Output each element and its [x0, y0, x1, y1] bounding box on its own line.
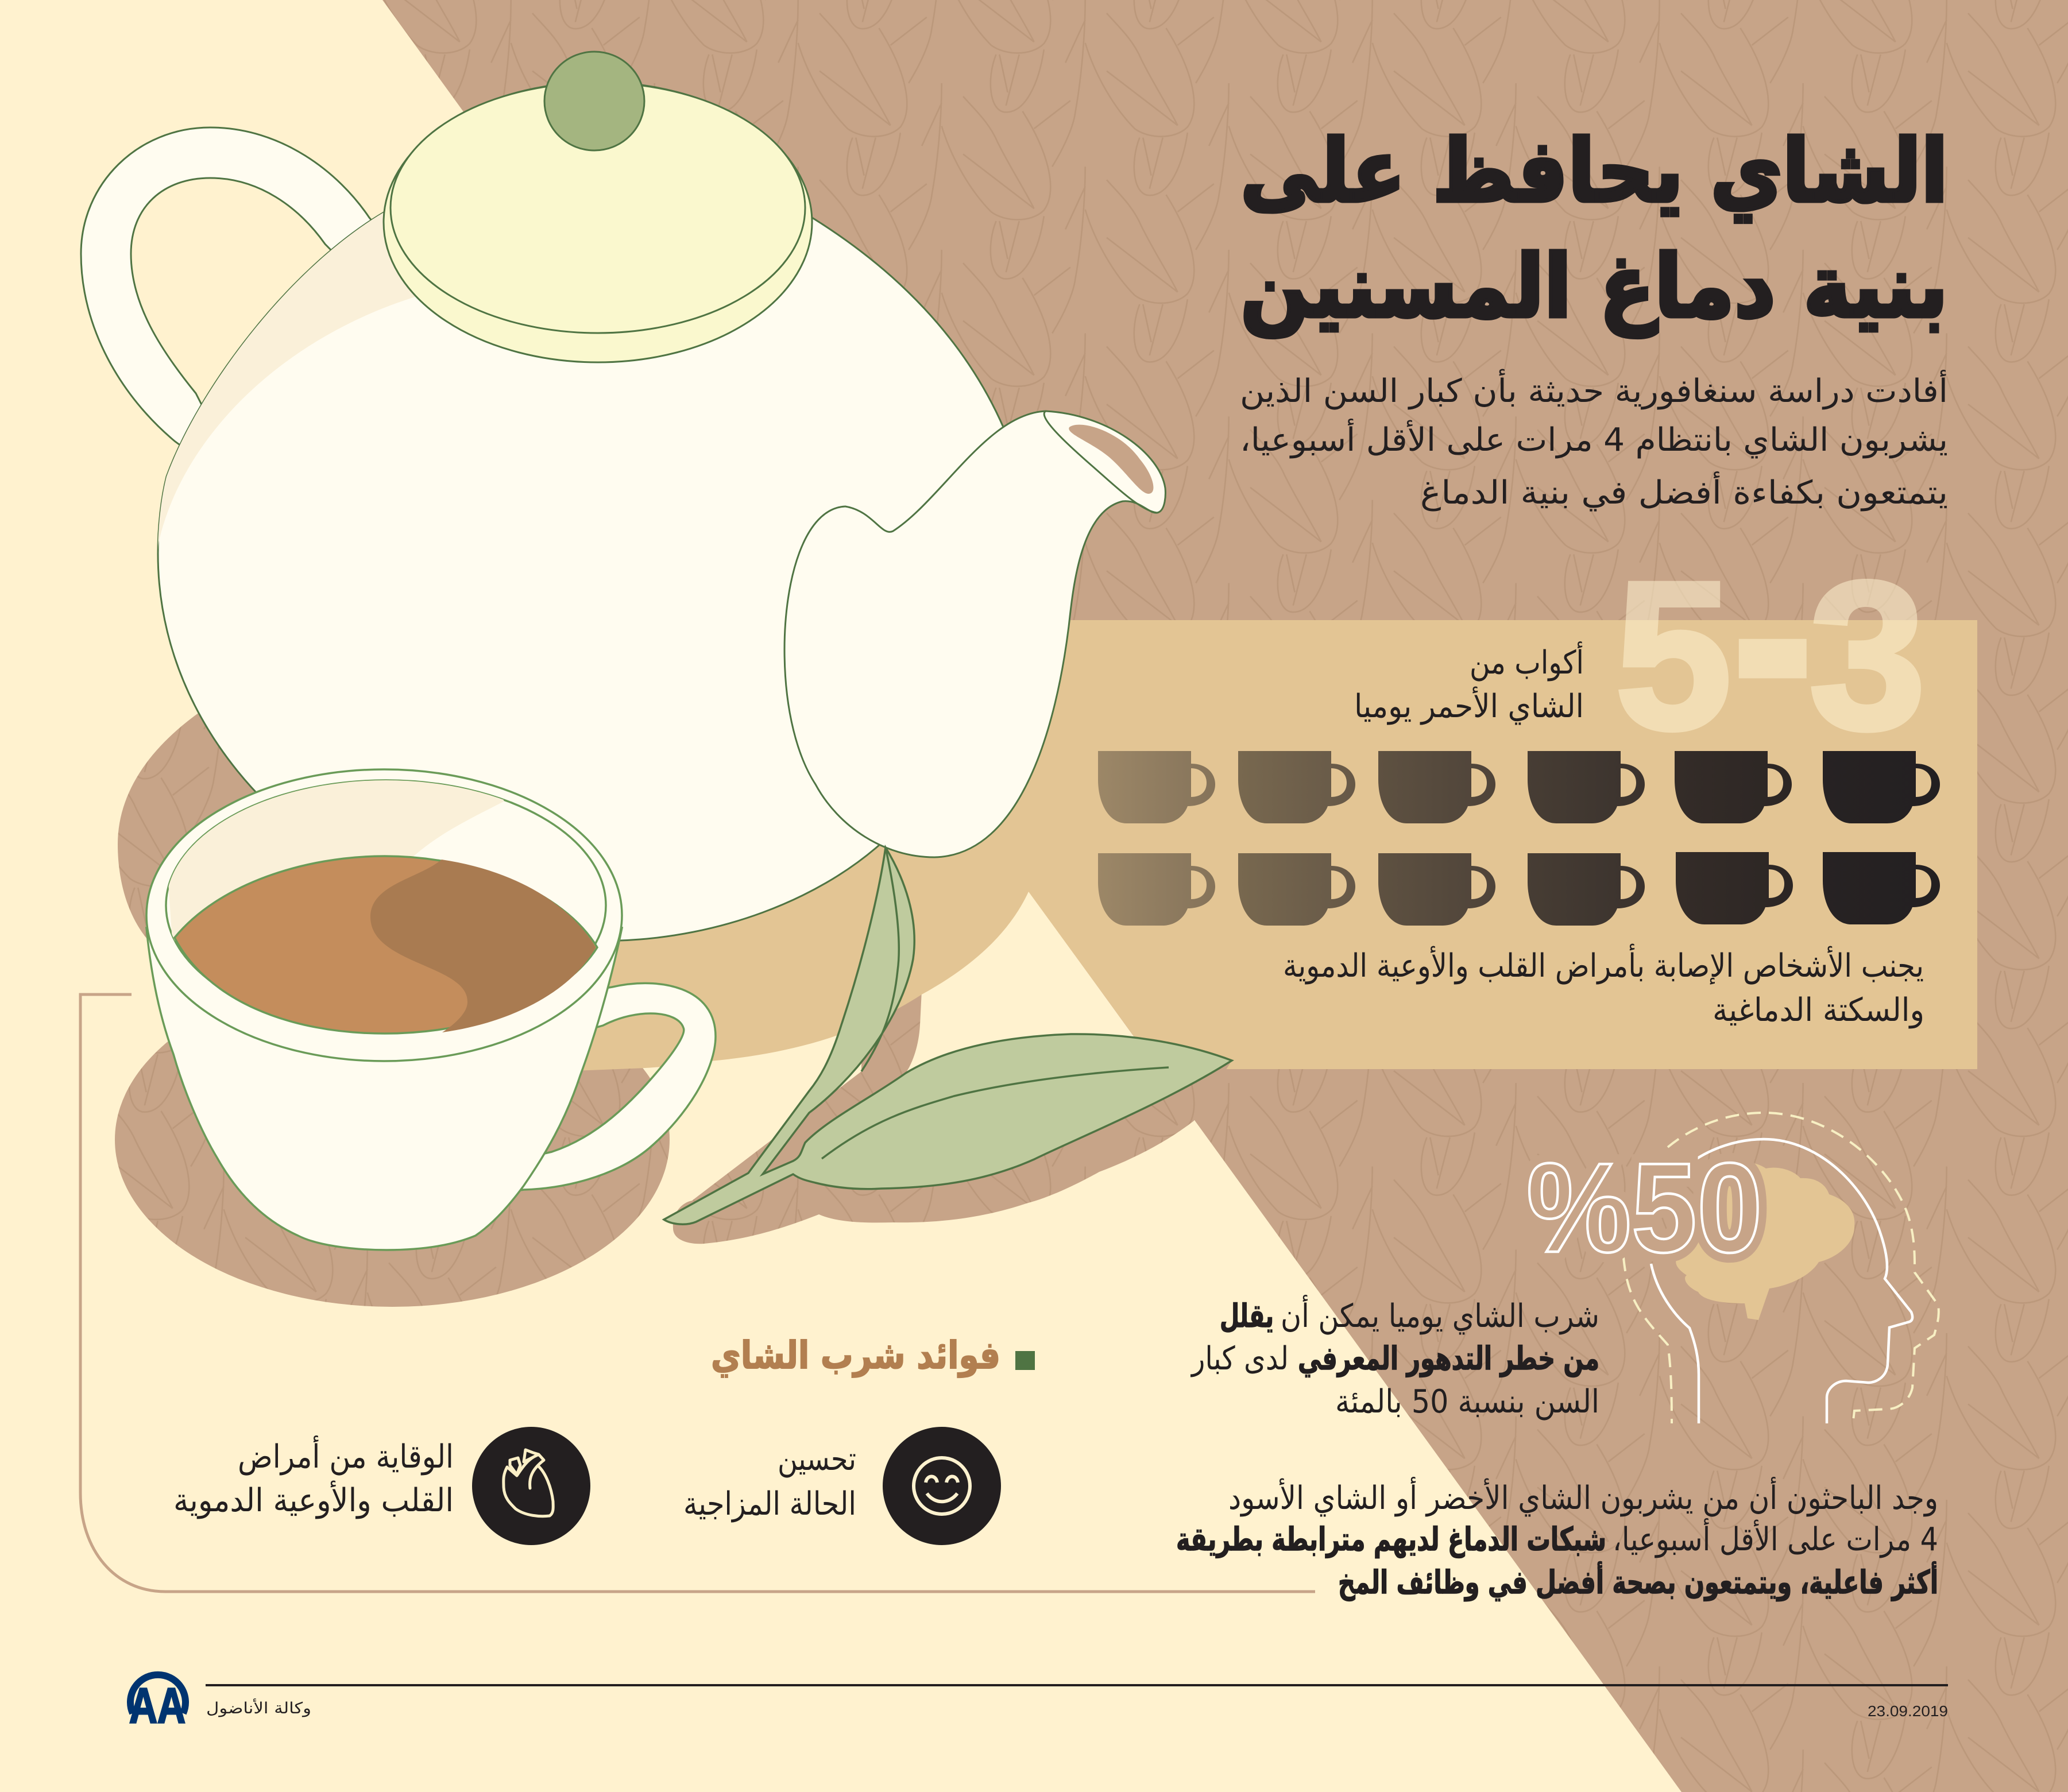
- leaf outline with stem: [664, 847, 1232, 1224]
- big number 5-3: [1615, 523, 1926, 773]
- teapot spout lip: [1044, 411, 1157, 513]
- brain: [1676, 1163, 1854, 1320]
- researchers text: وجد الباحثون أن من يشربون الشاي الأخضر أو الشاي الأسود: [1228, 1477, 1938, 1517]
- cognitive decline text: يقلل: [1220, 1298, 1274, 1335]
- agency name: وكالة الأناضول: [206, 1698, 311, 1717]
- big number 5-3: 5: [1615, 538, 1732, 773]
- band caption: يجنب الأشخاص الإصابة بأمراض القلب والأوعية الدموية: [1283, 943, 1924, 985]
- shadow: leaves, patterned: [673, 990, 1232, 1244]
- benefit: mood: تحسين: [778, 1441, 856, 1478]
- intro text: يشربون الشاي بانتظام 4 مرات على الأقل أسبوعيا،: [1240, 419, 1948, 459]
- logo: Anadolu Agency: AA: [129, 1678, 185, 1733]
- title: الشاي يحافظ على: [1240, 122, 1948, 222]
- teapot body: [158, 212, 1016, 940]
- benefit: heart disease prevention: الوقاية من أمراض: [238, 1435, 454, 1476]
- cognitive decline text: شرب الشاي يوميا يمكن أن: [1281, 1295, 1599, 1335]
- title: بنية دماغ المسنين: [1240, 237, 1948, 338]
- percentage halo: %50: [1526, 1137, 1762, 1279]
- tea leaves: [664, 847, 1232, 1224]
- benefits heading: فوائد شرب الشاي: [711, 1333, 1000, 1378]
- leaf midrib: [822, 1067, 1169, 1159]
- tea surface: [175, 856, 597, 1034]
- cognitive decline text: من خطر التدهور المعرفي: [1298, 1340, 1599, 1377]
- intro text: يتمتعون بكفاءة أفضل في بنية الدماغ: [1420, 471, 1948, 512]
- teapot illustration: [81, 52, 1165, 940]
- title: [1240, 122, 1948, 338]
- cups label: الشاي الأحمر يوميا: [1354, 686, 1584, 725]
- footer rule: [206, 1684, 1948, 1686]
- benefits bracket line: [80, 994, 1315, 1592]
- big number 5-3: 3: [1809, 538, 1926, 773]
- researchers text: 4 مرات على الأقل أسبوعيا،: [1613, 1518, 1938, 1558]
- panel: tan tea cups band: [976, 620, 1977, 1069]
- percentage number: %50: [1526, 1137, 1762, 1279]
- benefit: mood: الحالة المزاجية: [683, 1485, 856, 1523]
- dashed head halo: [1624, 1113, 1939, 1426]
- big number 5-3: -: [1738, 523, 1808, 758]
- icon: smiley: [883, 1427, 1001, 1545]
- icon: heart: [472, 1427, 590, 1545]
- cup rim: [146, 769, 622, 1061]
- benefit: heart disease prevention: القلب والأوعية الدموية: [173, 1480, 454, 1519]
- cup inner wall: [166, 780, 606, 1031]
- tea cup illustration: [146, 769, 716, 1250]
- benefit: mood: [683, 1441, 856, 1523]
- cup body: [146, 928, 622, 1250]
- tea surface dark swirl: [370, 860, 596, 1032]
- teapot lid top: [391, 83, 805, 333]
- leaf fold: [861, 847, 899, 1071]
- shadow: cup, patterned: [115, 973, 670, 1307]
- band caption: والسكتة الدماغية: [1713, 992, 1924, 1029]
- band caption: [1283, 943, 1924, 1029]
- teapot spout: [784, 411, 1165, 857]
- cup icons, two rows of six: [1098, 751, 1940, 926]
- benefit: heart disease prevention: [173, 1435, 454, 1519]
- teapot lid base: [384, 82, 812, 362]
- researchers text: شبكات الدماغ لديهم مترابطة بطريقة: [1176, 1521, 1606, 1558]
- cup handle: [494, 983, 716, 1194]
- teapot body shading: [158, 212, 415, 554]
- cognitive decline text: السن بنسبة 50 بالمئة: [1335, 1383, 1599, 1421]
- shadow: teapot on cream, patterned: [118, 712, 402, 976]
- teapot handle: [81, 127, 413, 494]
- head outline: [1651, 1139, 1912, 1423]
- cognitive decline text: لدى كبار: [1190, 1340, 1289, 1377]
- teapot spout opening: [1069, 425, 1153, 494]
- shadow: tan curve below teapot: [517, 746, 1029, 1071]
- cognitive decline text: [1190, 1295, 1599, 1421]
- date: 23.09.2019: [1868, 1702, 1948, 1720]
- intro text: [1240, 369, 1948, 512]
- cups label: [1354, 641, 1584, 725]
- researchers text: [1176, 1477, 1938, 1601]
- icon: head with brain: [1526, 1113, 1939, 1426]
- cups label: أكواب من: [1470, 641, 1584, 682]
- intro text: أفادت دراسة سنغافورية حديثة بأن كبار السن الذين: [1240, 369, 1948, 410]
- teapot knob: [544, 52, 644, 150]
- cup inner shading: [161, 769, 505, 942]
